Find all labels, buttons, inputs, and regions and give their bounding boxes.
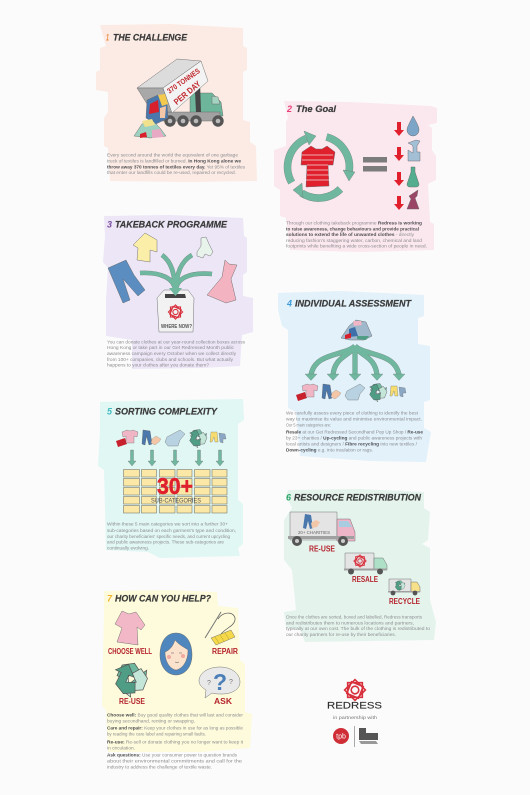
heading: takeback programme: 3 xyxy=(107,220,113,230)
text block: takeback xyxy=(107,340,246,368)
caption: in partnership with: in partnership with xyxy=(333,715,378,720)
arrows: five branches xyxy=(305,346,405,380)
icon: speech bubble with question marks: ? xyxy=(213,669,227,695)
text block: redistribution xyxy=(286,614,431,637)
red down arrows xyxy=(394,122,404,210)
heading: the challenge: THE CHALLENGE xyxy=(113,32,188,42)
text block: sorting: Within these 5 main categories we sort into a further 30+ xyxy=(107,522,228,526)
label: sub-categories: SUB-CATEGORIES xyxy=(151,498,201,504)
icon: socks xyxy=(197,237,213,258)
icon: blue jeans xyxy=(108,260,145,303)
truck: recycle xyxy=(388,579,420,595)
panel: 1 the challenge xyxy=(96,24,257,182)
text block: challenge: truck of textiles is landfilled or burned. In Hong Kong alone we xyxy=(107,158,242,164)
label: 370 tonnes per day: 370 TONNES xyxy=(165,66,202,96)
grid: sub-category boxes xyxy=(124,470,227,513)
heading: the goal xyxy=(286,104,337,115)
footer: redress and partner logos xyxy=(327,680,382,747)
heading: how can you help: 7 xyxy=(107,594,113,604)
text block: five categories xyxy=(286,430,424,452)
illustration: dump truck with clothes xyxy=(134,59,224,138)
icon: face with blue hair xyxy=(160,633,192,675)
icon: land pile xyxy=(407,190,419,209)
text block: sorting: sub-categories based on each garment's type and condition, xyxy=(107,528,236,533)
text block: takeback: You can donate clothes at our year-round collection boxes across xyxy=(107,340,246,344)
truck: re-use xyxy=(288,512,355,546)
icon: collection box: WHERE NOW? xyxy=(161,324,192,330)
label: ask: ASK xyxy=(214,697,232,706)
heading: how can you help: HOW CAN YOU HELP? xyxy=(115,594,211,604)
heading: individual assessment: 4 xyxy=(286,298,293,310)
heading: the goal: The Goal xyxy=(296,104,337,114)
label: re-use: RE-USE xyxy=(119,697,146,706)
logo: redress rosette xyxy=(345,680,365,700)
label: repair: REPAIR xyxy=(212,647,238,656)
text block: assessment intro: We carefully assess every piece of clothing to identify the best xyxy=(286,410,419,416)
label: 30+: 30+ xyxy=(157,473,193,499)
text block: choose well: buying secondhand, renting or swapping. xyxy=(107,718,195,724)
text block: redistribution: our charity partners for re-use by their beneficiaries. xyxy=(286,632,396,637)
icon: water drop xyxy=(407,116,419,136)
panel: 2 the goal xyxy=(274,101,437,252)
text block: sorting: continually evolving. xyxy=(107,546,149,550)
icon: pink t-shirt xyxy=(115,611,145,645)
text block: assessment intro xyxy=(286,410,422,428)
text block: ask questions: Ask questions: Use your consumer power to question brands xyxy=(107,752,238,758)
heading: the goal: 2 xyxy=(286,104,293,115)
text block: challenge: that enter our landfills could be re-used, repaired or recycled. xyxy=(107,170,236,175)
text block: sorting xyxy=(107,522,236,550)
heading: resource redistribution: 6 xyxy=(286,492,292,504)
wordmark: redress: REDRESS xyxy=(327,700,382,712)
label: choose well: CHOOSE WELL xyxy=(108,647,152,656)
text block: goal xyxy=(286,220,427,248)
text block: five categories: local artists and designers / Fibre recycling into new textiles / xyxy=(286,442,418,446)
label: resale: RESALE xyxy=(352,575,379,584)
heading: takeback programme: TAKEBACK PROGRAMME xyxy=(115,220,228,230)
panel: 3 takeback programme xyxy=(103,215,253,369)
text block: re-use: Re-use: Re-sell or donate clothing you no longer want to keep it xyxy=(107,740,244,744)
text block: goal: reducing fashion's staggering water, carbon, chemical and land xyxy=(286,238,423,243)
panel: 4 individual assessment xyxy=(278,291,431,462)
panel: 7 how can you help xyxy=(102,590,252,770)
icon: speech bubble with question marks: ? xyxy=(207,680,211,687)
text block: goal: Through our clothing takeback programme Redress is working xyxy=(286,220,422,226)
label: 370 tonnes per day: PER DAY xyxy=(172,78,203,107)
icon: recycle xyxy=(109,663,152,701)
text block: assessment intro: Our 5 main categories are: xyxy=(286,422,331,428)
panel: 6 resource redistribution xyxy=(284,489,436,642)
text block: sorting: our charity beneficiaries' specific needs, and current upcycling xyxy=(107,534,230,539)
text block: sorting: and public awareness projects. These sub-categories are xyxy=(107,540,225,544)
text block: redistribution: and redistributes them to numerous locations and partners, xyxy=(286,620,414,626)
text block: takeback: awareness campaign every October when we collect directly xyxy=(107,351,237,356)
text block: re-use xyxy=(107,740,244,750)
text block: five categories: Resale at our Get Redressed Secondhand Pop Up Shop / Re-use xyxy=(286,430,424,434)
text block: goal: to raise awareness, change behaviours and provide practical xyxy=(286,226,419,232)
icon: red striped t-shirt xyxy=(301,146,335,187)
truck: re-use: 20+ CHARITIES xyxy=(298,530,330,536)
panel background: green brush xyxy=(284,489,436,642)
text block: takeback: happens to your clothes after you donate them? xyxy=(107,362,210,368)
text block: assessment intro: way to maximise its value and minimise environmental impact. xyxy=(286,416,422,422)
text block: care and repair: Care and repair: Keep your clothes in use for as long as possible xyxy=(107,726,244,730)
icon: pile of clothes xyxy=(341,320,372,340)
icon: needle, thread and spool xyxy=(205,612,235,645)
icon: pink dress xyxy=(207,260,237,303)
icon: equals sign xyxy=(363,157,387,172)
panel background: mint brush xyxy=(98,399,244,558)
icons: five clothing categories xyxy=(296,383,406,404)
truck: resale xyxy=(344,553,387,574)
text block: care and repair xyxy=(107,726,244,736)
text block: goal: footprints while benefiting a wide cross-section of people in need. xyxy=(286,244,427,248)
panel background: peach brush xyxy=(96,24,257,182)
text block: goal: solutions to extend the life of unwanted clothes - directly xyxy=(286,232,415,237)
icon: speech bubble with question marks: ? xyxy=(229,679,233,686)
text block: challenge: Every second around the world the equivalent of one garbage xyxy=(107,152,239,158)
panel background: yellow brush xyxy=(102,590,252,752)
text block: five categories: by 23+ charities / Up-cycling and public awareness projects with xyxy=(286,436,423,440)
text block: redistribution: typically at our own cost. The bulk of the clothing is redistributed to xyxy=(286,626,431,631)
text block: takeback: Hong Kong or take part in our Get Redressed Month public xyxy=(107,345,235,350)
icon: factory xyxy=(408,140,420,161)
panel background: lilac brush xyxy=(103,215,253,369)
text block: challenge: throw away 370 tonnes of textiles every day. Yet 95% of textiles xyxy=(107,164,246,170)
logo: tpb: tpb xyxy=(336,734,346,740)
panel background: pink brush xyxy=(274,101,437,252)
text block: choose well xyxy=(107,712,244,724)
panel: 5 sorting complexity xyxy=(98,399,244,558)
text block: choose well: Choose well: Buy good quality clothes that will last and consider xyxy=(107,712,244,718)
heading: the challenge: 1 xyxy=(106,32,109,44)
arrows: five down xyxy=(128,450,224,466)
heading: resource redistribution: RESOURCE REDISTRIBUTION xyxy=(294,492,421,502)
heading: sorting complexity: 5 xyxy=(107,406,113,418)
icon: flask xyxy=(407,167,419,187)
text block: five categories: Down-cycling e.g. into insulation or rags. xyxy=(286,448,373,452)
text block: ask questions xyxy=(107,752,243,770)
label: recycle: RECYCLE xyxy=(389,597,421,606)
text block: takeback: from 100+ companies, clubs and schools. But what actually xyxy=(107,357,234,362)
label: re-use: RE-USE xyxy=(309,544,336,554)
text block: redistribution: Once the clothes are sorted, boxed and labelled, Redress transports xyxy=(286,614,423,620)
text block: re-use: in circulation. xyxy=(107,746,135,750)
icon: collection box xyxy=(157,288,194,332)
heading: individual assessment: INDIVIDUAL ASSESSMENT xyxy=(295,298,413,308)
logo: partner building xyxy=(359,728,378,744)
icon: speech bubble with question marks xyxy=(199,667,240,698)
text block: care and repair: by reading the care label and repairing small faults. xyxy=(107,732,206,736)
arrow: four branches into box xyxy=(140,255,212,291)
text block: ask questions: about their environmental commitments and call for the xyxy=(107,758,243,764)
text block: ask questions: industry to address the challenge of textile waste. xyxy=(107,764,212,770)
label: 370 tonnes per day xyxy=(165,66,203,107)
icon: yellow shirt xyxy=(133,233,157,262)
icons: five clothing categories xyxy=(116,429,226,450)
panel background: blue brush xyxy=(278,291,431,462)
text block: challenge xyxy=(107,152,246,175)
heading: sorting complexity: SORTING COMPLEXITY xyxy=(115,406,218,416)
icon: circular arrows xyxy=(288,131,355,198)
